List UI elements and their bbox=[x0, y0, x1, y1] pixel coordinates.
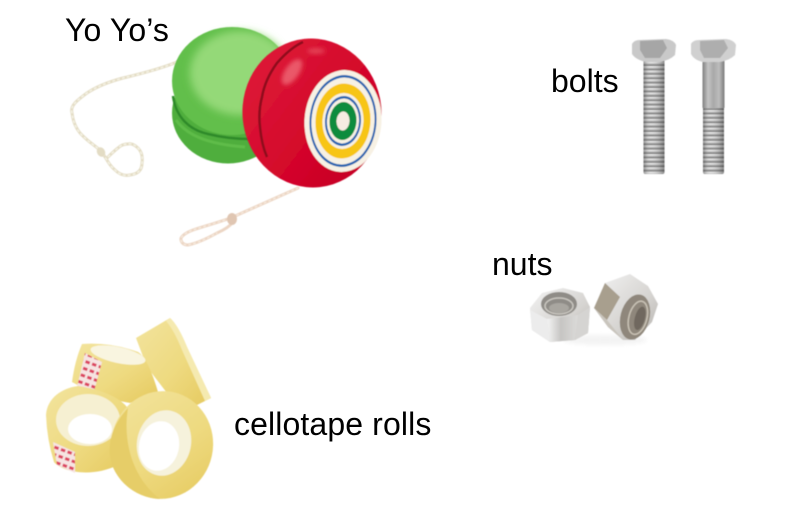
icon: white string of green yo-yo bbox=[72, 62, 177, 175]
icon: left roll bbox=[46, 386, 130, 473]
icon: concentric rings bbox=[301, 67, 385, 175]
icon: bolts bbox=[632, 39, 736, 174]
icon: partly threaded bolt bbox=[691, 39, 736, 174]
icon: red-printed label bbox=[77, 353, 102, 395]
icon: red-printed label bbox=[53, 442, 75, 473]
label: nuts: nuts bbox=[492, 246, 552, 282]
icon: right nut bbox=[594, 274, 658, 343]
icon: pink string of red yo-yo bbox=[181, 188, 298, 245]
icon: rear roll bbox=[72, 341, 158, 403]
icon: green yo-yo bbox=[172, 27, 292, 164]
icon: cellotape rolls bbox=[46, 318, 223, 508]
icon: faint nut shadow bbox=[563, 335, 647, 345]
icon: top right roll bbox=[136, 318, 211, 407]
icon: red yo-yo bbox=[235, 32, 389, 194]
icon: hex nuts bbox=[530, 274, 658, 345]
label: Yo Yo's: Yo Yo’s bbox=[65, 12, 169, 48]
icon: yo-yos with strings bbox=[72, 27, 389, 245]
icon: front roll bbox=[101, 382, 223, 508]
icon: left nut bbox=[530, 288, 590, 342]
label: bolts: bolts bbox=[551, 63, 619, 99]
icon: fully threaded bolt bbox=[632, 39, 676, 174]
label: cellotape rolls: cellotape rolls bbox=[234, 406, 431, 442]
